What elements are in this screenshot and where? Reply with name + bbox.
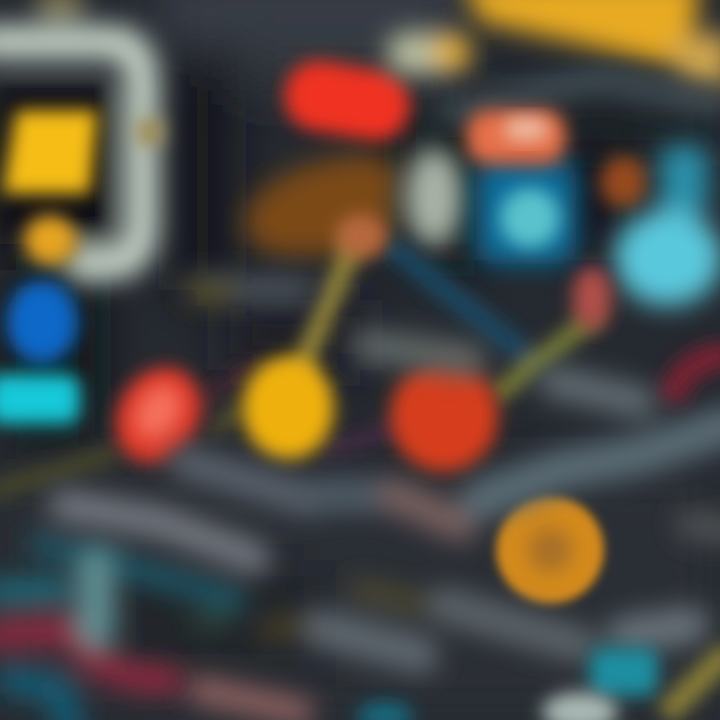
olive diagonal bottom right [665, 650, 720, 715]
chart point: orange red [390, 360, 498, 472]
small orange blob [600, 156, 648, 208]
line chart: connecting lines [0, 240, 590, 490]
icon: yellow square [2, 110, 164, 194]
blurred text strokes [40, 288, 720, 712]
pale ellipse [404, 147, 464, 247]
small teal blob bottom [357, 702, 413, 720]
red curve right [670, 355, 720, 402]
panel: device outline [0, 0, 142, 264]
panel: grey band top right [440, 78, 720, 115]
chart point: yellow [242, 356, 334, 460]
icon: red capsule [279, 55, 415, 146]
icon: small amber badge [23, 215, 77, 265]
lower left coloured lines [0, 565, 170, 720]
icon: cyan bar [0, 374, 80, 424]
top marker at line end [336, 214, 388, 258]
brown cloud shape [244, 155, 398, 256]
icon: blue tile [6, 280, 78, 364]
coin: amber [496, 496, 604, 604]
chart point: pinkish red [98, 352, 218, 478]
icon: cyan bottle [614, 145, 720, 306]
pale blob bottom [542, 692, 618, 720]
right marker at line end [572, 266, 612, 330]
icon: teal tile bottom right [590, 648, 658, 696]
icon: blue jar [466, 110, 576, 264]
pale pill top [388, 32, 470, 74]
banner: yellow top right [462, 0, 720, 90]
